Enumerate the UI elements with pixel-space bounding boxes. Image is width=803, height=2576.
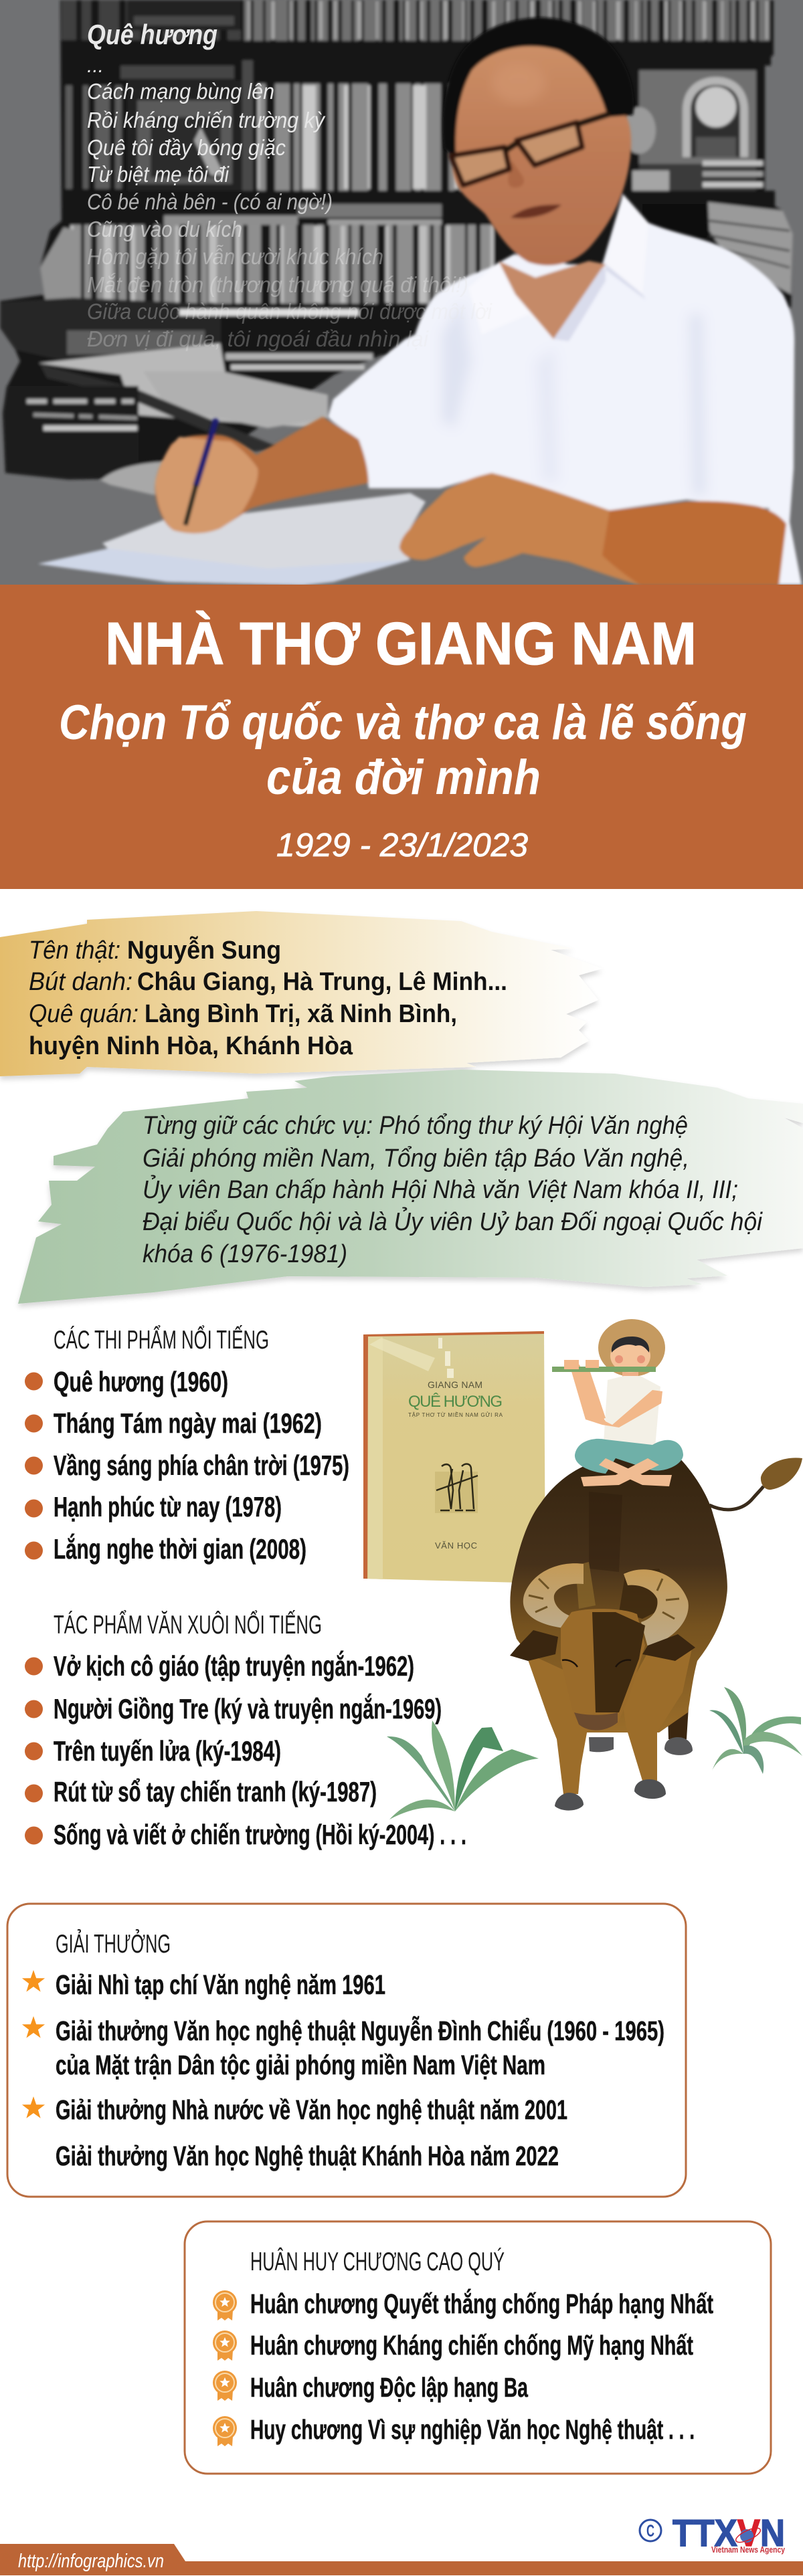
personal details text: Bút danh: xyxy=(29,968,132,996)
years: 1929 - 23/1/2023 xyxy=(276,827,528,864)
illustration: boy playing flute on buffalo xyxy=(510,1319,802,1811)
boy xyxy=(552,1319,683,1486)
prose list xyxy=(25,1650,466,1850)
footer bar xyxy=(0,2544,803,2575)
personal details text xyxy=(29,935,507,1060)
book cover: Quê hương: TẬP THƠ TỪ MIỀN NAM GỬI RA xyxy=(408,1411,503,1418)
panel: positions held xyxy=(18,1070,803,1304)
awards list: Giải Nhì tạp chí Văn nghệ năm 1961 xyxy=(56,1969,385,2000)
fingers xyxy=(564,1360,599,1369)
personal details text: Nguyễn Sung xyxy=(127,935,281,965)
poems list: Lắng nghe thời gian (2008) xyxy=(54,1532,306,1565)
personal details text: Tên thật: xyxy=(29,936,120,965)
poem: Quê hương: Hôm gặp tôi vẫn cười khúc khích xyxy=(87,244,383,269)
illustration: left plant xyxy=(387,1720,539,1819)
glasses xyxy=(451,122,582,185)
panel: famous prose xyxy=(25,1609,466,1850)
panel: medals xyxy=(185,2221,771,2474)
muzzle xyxy=(574,1712,618,1730)
subtitle xyxy=(59,696,747,805)
papers on desk xyxy=(38,493,426,585)
closed eyes xyxy=(562,1660,631,1667)
illustration: right plant xyxy=(709,1687,802,1774)
poem: Quê hương: Rồi kháng chiến trường kỳ xyxy=(87,108,326,132)
poem: Quê hương: Cô bé nhà bên - (có ai ngờ!) xyxy=(87,189,333,214)
positions text xyxy=(143,1112,763,1268)
poem: Quê hương: Cũng vào du kích xyxy=(87,217,242,241)
heading: medals: HUÂN HUY CHƯƠNG CAO QUÝ xyxy=(250,2248,505,2276)
main title: NHÀ THƠ GIANG NAM xyxy=(105,610,697,678)
prose list: Vở kịch cô giáo (tập truyện ngắn-1962) xyxy=(54,1650,414,1682)
book cover: Quê hương: GIANG NAM xyxy=(428,1379,482,1390)
positions text: khóa 6 (1976-1981) xyxy=(143,1240,347,1268)
panel: awards xyxy=(7,1904,686,2197)
icons: stars xyxy=(22,1970,45,2118)
personal details text: Châu Giang, Hà Trung, Lê Minh... xyxy=(137,968,507,996)
shirt xyxy=(604,1376,660,1447)
logo: TTXVN: Vietnam News Agency xyxy=(711,2545,785,2555)
book cover: Quê hương: VĂN HỌC xyxy=(435,1541,477,1551)
personal details text: huyện Ninh Hòa, Khánh Hòa xyxy=(29,1032,353,1060)
prose list: Người Giồng Tre (ký và truyện ngắn-1969) xyxy=(54,1692,442,1724)
nose shadow xyxy=(508,161,524,187)
horn ridges xyxy=(529,1579,679,1619)
poems list: Quê hương (1960) xyxy=(54,1366,228,1397)
buffalo head xyxy=(561,1609,645,1732)
neck xyxy=(622,1368,638,1380)
panel: famous poems xyxy=(25,1324,349,1565)
arms xyxy=(569,1365,662,1427)
hooves xyxy=(555,1779,666,1811)
mouth xyxy=(511,205,561,218)
positions text: Đại biểu Quốc hội và là Ủy viên Uỷ ban Đối ngoại Quốc hội xyxy=(143,1206,763,1236)
flute xyxy=(552,1367,656,1372)
personal details text: Quê quán: xyxy=(29,1000,139,1028)
hat xyxy=(598,1319,665,1377)
icons: medals xyxy=(213,2290,237,2446)
white shirt xyxy=(328,194,802,585)
awards list: Giải thưởng Văn học Nghệ thuật Khánh Hòa năm 2022 xyxy=(56,2141,559,2171)
poem: Quê hương xyxy=(87,19,493,351)
neck xyxy=(499,261,606,339)
right hand and arm xyxy=(399,473,786,585)
poems list: Vầng sáng phía chân trời (1975) xyxy=(54,1450,349,1481)
poem: Quê hương: ... xyxy=(87,55,104,77)
awards list: của Mặt trận Dân tộc giải phóng miền Nam Việt Nam xyxy=(56,2050,545,2080)
panel: personal details xyxy=(0,911,602,1076)
awards list xyxy=(56,1969,664,2171)
poem: Quê hương: Đơn vị đi qua, tôi ngoái đầu nhìn lại xyxy=(87,326,430,351)
ears xyxy=(510,1630,695,1661)
buffalo tail xyxy=(709,1458,802,1510)
medals list: Huân chương Độc lập hạng Ba xyxy=(250,2372,529,2403)
writing hand xyxy=(155,417,369,533)
trousers xyxy=(575,1439,683,1474)
photo: poet at his desk xyxy=(0,0,803,585)
prose list: Trên tuyến lửa (ký-1984) xyxy=(54,1735,281,1767)
positions text: Từng giữ các chức vụ: Phó tổng thư ký Hội Văn nghệ xyxy=(143,1112,688,1140)
personal details text: Làng Bình Trị, xã Ninh Bình, xyxy=(145,1000,457,1028)
woodcut soldiers xyxy=(435,1464,478,1513)
poem: Quê hương: Quê hương xyxy=(87,19,217,51)
poem: Quê hương: Cách mạng bùng lên xyxy=(87,79,274,104)
book cover: Quê hương: QUÊ HƯƠNG xyxy=(408,1393,503,1411)
medals list xyxy=(250,2288,713,2445)
book cover: Quê hương xyxy=(363,1331,545,1583)
horns xyxy=(523,1563,689,1647)
back stripe and saddle shading xyxy=(589,1492,622,1572)
buffalo body xyxy=(510,1452,727,1732)
poems list: Tháng Tám ngày mai (1962) xyxy=(54,1407,322,1439)
logo: TTXVN: TTXVN xyxy=(673,2512,785,2555)
man: shirt, face, arms xyxy=(38,17,802,585)
positions text: Giải phóng miền Nam, Tổng biên tập Báo Văn nghệ, xyxy=(143,1145,689,1173)
prose list: Rút từ sổ tay chiến tranh (ký-1987) xyxy=(54,1776,377,1807)
poems list: Hạnh phúc từ nay (1978) xyxy=(54,1491,282,1522)
crossed legs and feet xyxy=(581,1458,672,1486)
heading: awards: GIẢI THƯỞNG xyxy=(56,1929,171,1959)
poem: Quê hương: Giữa cuộc hành quân không nói được một lời xyxy=(87,299,493,324)
shirt soft shading xyxy=(442,301,706,495)
poem: Quê hương: Quê tôi đầy bóng giặc xyxy=(87,135,286,160)
subtitle: của đời mình xyxy=(266,751,541,805)
hair xyxy=(612,1336,649,1353)
poem: Quê hương: Mắt đen tròn (thương thương quá đi thôi!) xyxy=(87,272,468,297)
pen xyxy=(196,421,215,485)
prose list: Sống và viết ở chiến trường (Hồi ký-2004) . . . xyxy=(54,1819,466,1850)
rear legs xyxy=(589,1686,693,1755)
poems list xyxy=(25,1366,349,1565)
front legs xyxy=(525,1646,693,1794)
positions text: Ủy viên Ban chấp hành Hội Nhà văn Việt Nam khóa II, III; xyxy=(143,1174,738,1204)
heading: poems: CÁC THI PHẨM NỔI TIẾNG xyxy=(54,1324,269,1355)
poem: Quê hương: Từ biệt mẹ tôi đi xyxy=(87,162,230,187)
collar xyxy=(606,194,648,294)
website url: http://infographics.vn xyxy=(18,2551,164,2572)
awards list: Giải thưởng Nhà nước về Văn học nghệ thuật năm 2001 xyxy=(56,2094,567,2125)
hair xyxy=(443,17,634,161)
face xyxy=(452,45,631,266)
bookshelf background xyxy=(0,0,793,495)
logo: TTXVN: C xyxy=(646,2522,654,2541)
title banner xyxy=(0,585,803,889)
heading: prose: TÁC PHẨM VĂN XUÔI NỔI TIẾNG xyxy=(54,1609,322,1640)
face xyxy=(610,1339,650,1373)
